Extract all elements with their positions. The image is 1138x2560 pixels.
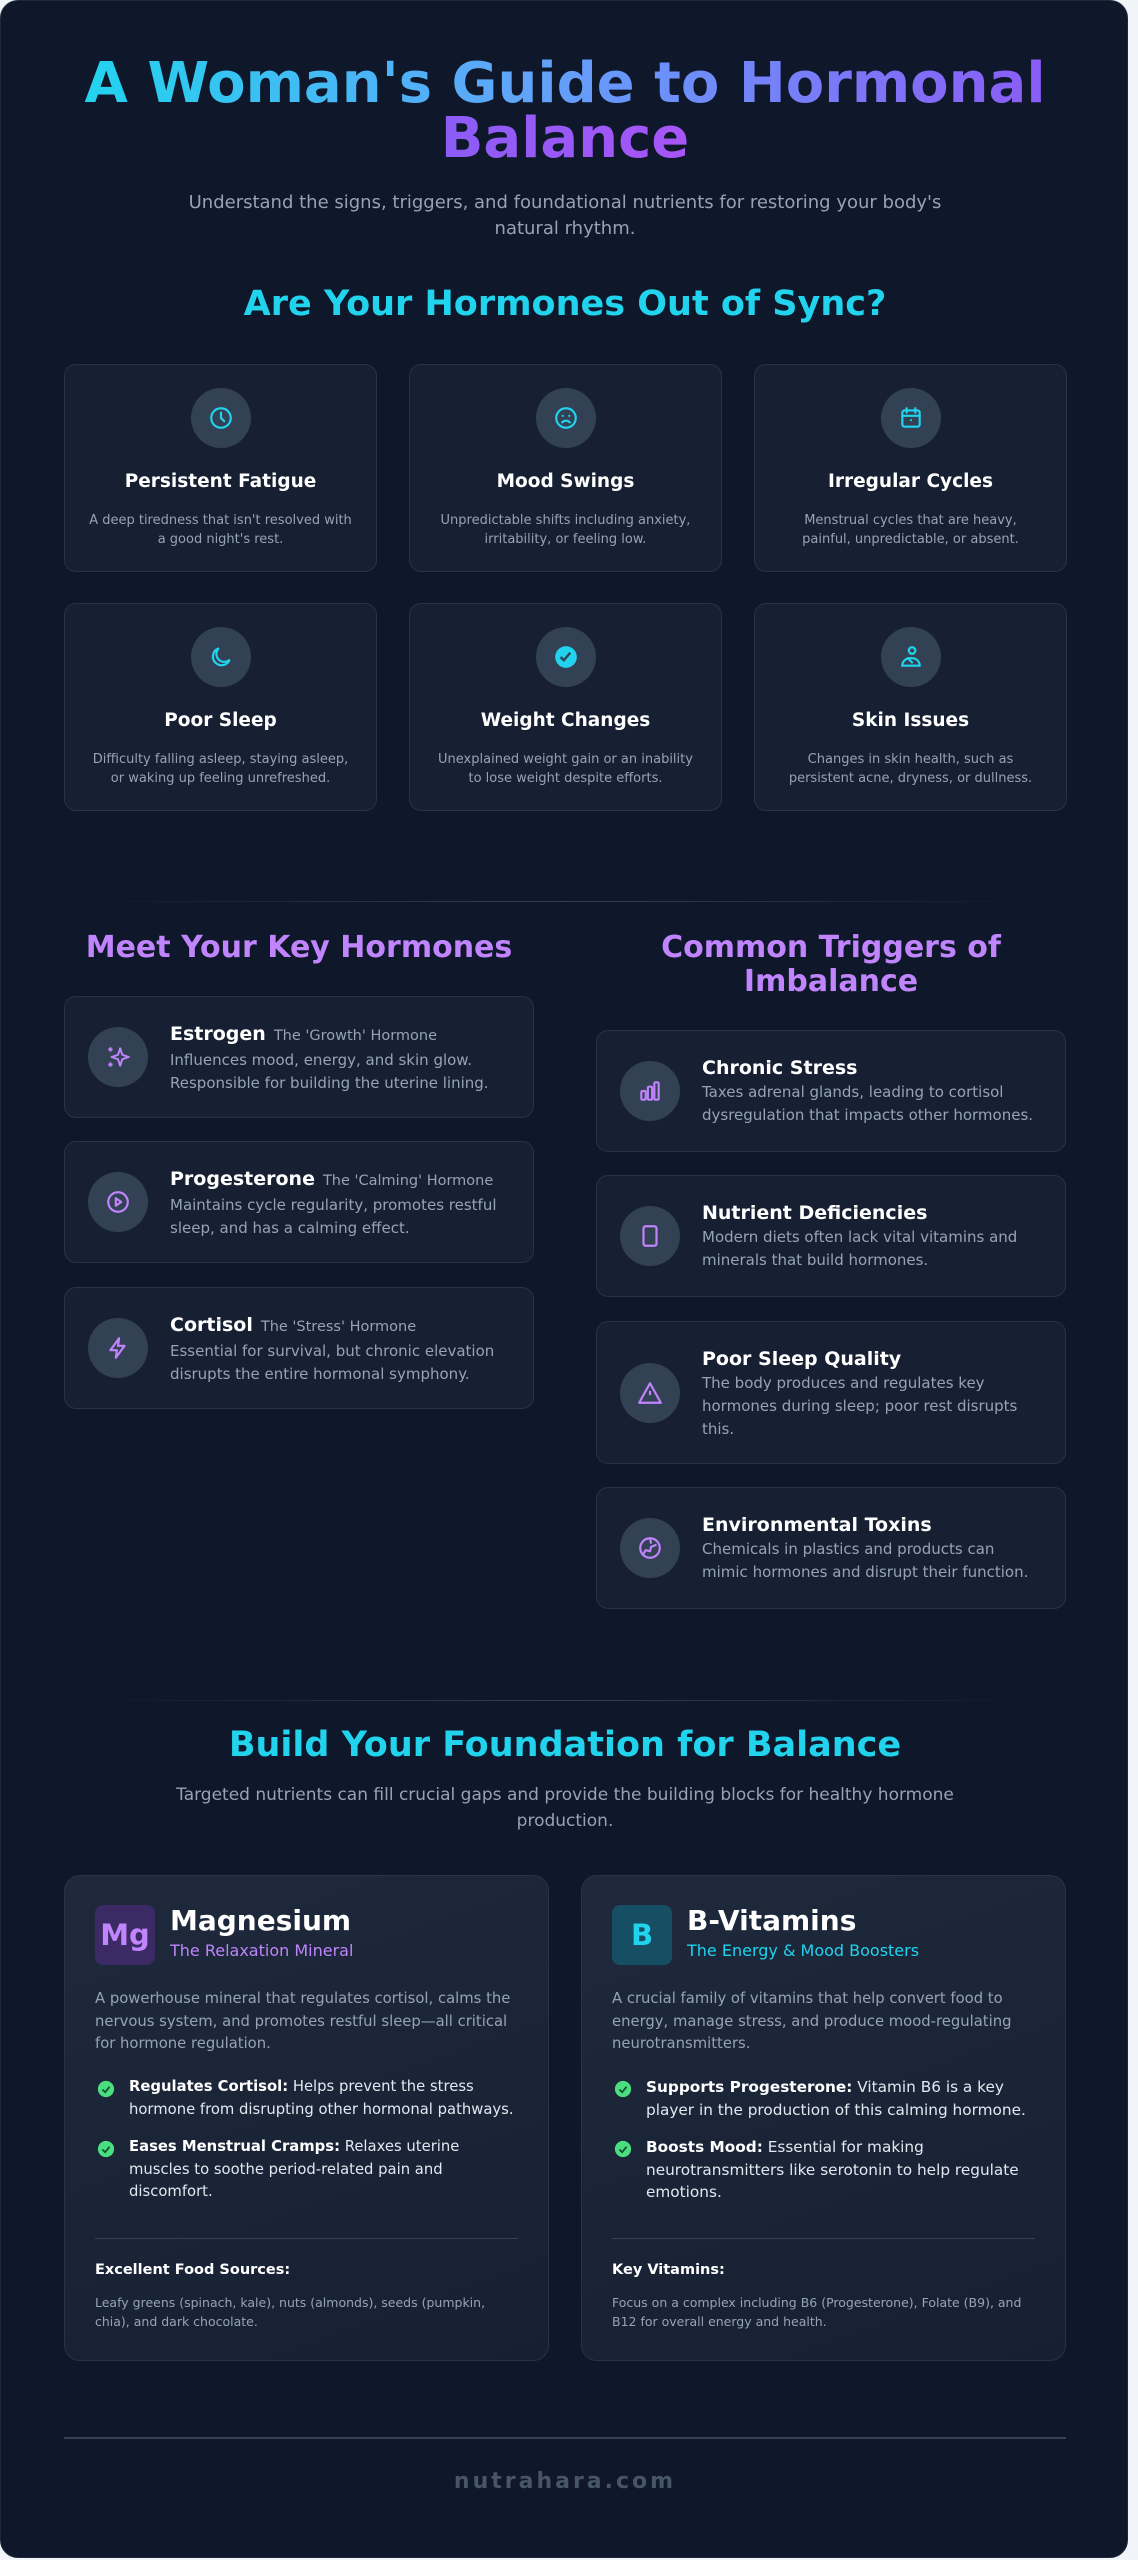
card: b-vitamins: Key Vitamins: [612, 2262, 725, 2278]
card: weight changes: Weight Changes [481, 710, 650, 731]
title: Balance [441, 106, 689, 171]
card: poor sleep: Difficulty falling asleep, staying asleep, or waking up feeling unrefreshed. [93, 752, 348, 786]
card: b-vitamins: B-Vitamins [687, 1904, 856, 1937]
icon: check circle [536, 627, 596, 687]
card: b-vitamins: Supports Progesterone: Vitamin B6 is a key player in the production of this calming hormone. [646, 2078, 1026, 2118]
badge: Mg [95, 1905, 155, 1965]
card: b-vitamins: Focus on a complex including B6 (Progesterone), Folate (B9), and B12 for overall energy and health. [612, 2295, 1021, 2329]
card: mood swings: Mood Swings [497, 471, 634, 492]
card: cortisol: Cortisol The 'Stress' Hormone [170, 1314, 416, 1336]
icon: tablet [620, 1206, 680, 1266]
card: b-vitamins: The Energy & Mood Boosters [687, 1941, 919, 1960]
card: nutrient deficiencies [596, 1175, 1066, 1297]
card: skin issues [754, 603, 1067, 811]
card: magnesium: Regulates Cortisol: Helps prevent the stress hormone from disrupting other hormonal pathways. [129, 2078, 514, 2118]
icon: moon [191, 627, 251, 687]
heading: triggers: Common Triggers of [661, 930, 1001, 965]
card: nutrient deficiencies: Modern diets often lack vital vitamins and minerals that build hormones. [702, 1228, 1017, 1269]
icon: calendar [881, 388, 941, 448]
card: magnesium: Excellent Food Sources: [95, 2262, 290, 2278]
card: magnesium: Eases Menstrual Cramps: Relaxes uterine [129, 2138, 459, 2155]
card: mood swings: Unpredictable shifts including anxiety, irritability, or feeling low. [441, 513, 690, 547]
heading: out of sync: Are Your Hormones Out of Sync? [244, 284, 886, 324]
card: environmental toxins: Environmental Toxins [702, 1514, 932, 1536]
card: poor sleep quality: The body produces and regulates key hormones during sleep; poor rest disrupts this. [702, 1374, 1017, 1438]
card: magnesium: The Relaxation Mineral [170, 1941, 353, 1960]
icon: play circle [88, 1172, 148, 1232]
card: persistent fatigue [64, 364, 377, 572]
icon: face [536, 388, 596, 448]
card: b-vitamins [581, 1875, 1066, 2361]
card: persistent fatigue: A deep tiredness that isn't resolved with a good night's rest. [89, 513, 352, 547]
card: magnesium [64, 1875, 549, 2361]
heading: triggers [661, 930, 1002, 999]
title [84, 51, 1046, 171]
icon: bolt [88, 1318, 148, 1378]
icon: bars [620, 1061, 680, 1121]
card: poor sleep: Poor Sleep [164, 710, 277, 731]
card: environmental toxins: Chemicals in plastics and products can mimic hormones and disrupt their function. [702, 1540, 1028, 1581]
card: progesterone: Progesterone The 'Calming' Hormone [170, 1168, 493, 1190]
icon: sparkles [88, 1027, 148, 1087]
icon: globe [620, 1518, 680, 1578]
card: chronic stress [596, 1030, 1066, 1152]
card: irregular cycles: Menstrual cycles that are heavy, [804, 513, 1017, 528]
card: environmental toxins [596, 1487, 1066, 1609]
badge: B [612, 1905, 672, 1965]
card: estrogen: Influences mood, energy, and skin glow. Responsible for building the uterine lining. [170, 1051, 489, 1092]
card: estrogen [64, 996, 534, 1118]
card: cortisol [64, 1287, 534, 1409]
foundation subtitle: Targeted nutrients can fill crucial gaps and provide the building blocks for healthy hormone production. [176, 1785, 954, 1831]
card: cortisol: Essential for survival, but chronic elevation disrupts the entire hormonal symphony. [170, 1342, 494, 1383]
card: b-vitamins: Boosts Mood: Essential for making neurotransmitters like serotonin to help regulate emotions. [646, 2138, 1019, 2201]
icon: clock [191, 388, 251, 448]
card: skin issues: Changes in skin health, such as persistent acne, dryness, or dullness. [789, 752, 1032, 786]
card: estrogen: Estrogen The 'Growth' Hormone [170, 1023, 437, 1045]
card: irregular cycles [754, 364, 1067, 572]
card: progesterone: Maintains cycle regularity, promotes restful sleep, and has a calming effect. [170, 1196, 496, 1237]
card: poor sleep quality: Poor Sleep Quality [702, 1348, 901, 1370]
heading: triggers: Imbalance [744, 964, 918, 999]
card: magnesium: Leafy greens (spinach, kale), nuts (almonds), seeds (pumpkin, chia), and dark chocolate. [95, 2295, 485, 2329]
card: chronic stress: Taxes adrenal glands, leading to cortisol dysregulation that impacts other hormones. [702, 1083, 1033, 1124]
badge: Mg: Mg [100, 1918, 150, 1952]
card: persistent fatigue: Persistent Fatigue [125, 471, 316, 492]
card: irregular cycles: painful, unpredictable, or absent. [802, 532, 1019, 547]
card: weight changes: Unexplained weight gain or an inability to lose weight despite efforts. [438, 752, 693, 786]
card: magnesium: muscles to soothe period-related pain and discomfort. [129, 2160, 443, 2200]
card: poor sleep quality [596, 1321, 1066, 1464]
card: mood swings [409, 364, 722, 572]
card: weight changes [409, 603, 722, 811]
card: chronic stress: Chronic Stress [702, 1057, 857, 1079]
card: progesterone [64, 1141, 534, 1263]
card: irregular cycles: Irregular Cycles [828, 471, 993, 492]
heading: key hormones: Meet Your Key Hormones [86, 930, 512, 965]
badge: B: B [631, 1918, 653, 1952]
card: nutrient deficiencies: Nutrient Deficiencies [702, 1202, 927, 1224]
card: magnesium: Magnesium [170, 1904, 351, 1937]
card: skin issues: Skin Issues [852, 710, 969, 731]
icon: person [881, 627, 941, 687]
card: magnesium: A powerhouse mineral that regulates cortisol, calms the nervous system, and promotes restful sleep—all critical for hormone regulation. [95, 1990, 510, 2052]
card: poor sleep [64, 603, 377, 811]
card: b-vitamins: A crucial family of vitamins that help convert food to energy, manage stress, and produce mood-regulating neurotransmitters. [612, 1990, 1012, 2052]
title: A Woman's Guide to Hormonal [84, 51, 1046, 116]
icon: warning [620, 1362, 680, 1422]
subtitle: Understand the signs, triggers, and foundational nutrients for restoring your body's natural rhythm. [189, 192, 941, 239]
footer: nutrahara.com [454, 2469, 676, 2494]
heading: foundation: Build Your Foundation for Balance [229, 1725, 901, 1765]
